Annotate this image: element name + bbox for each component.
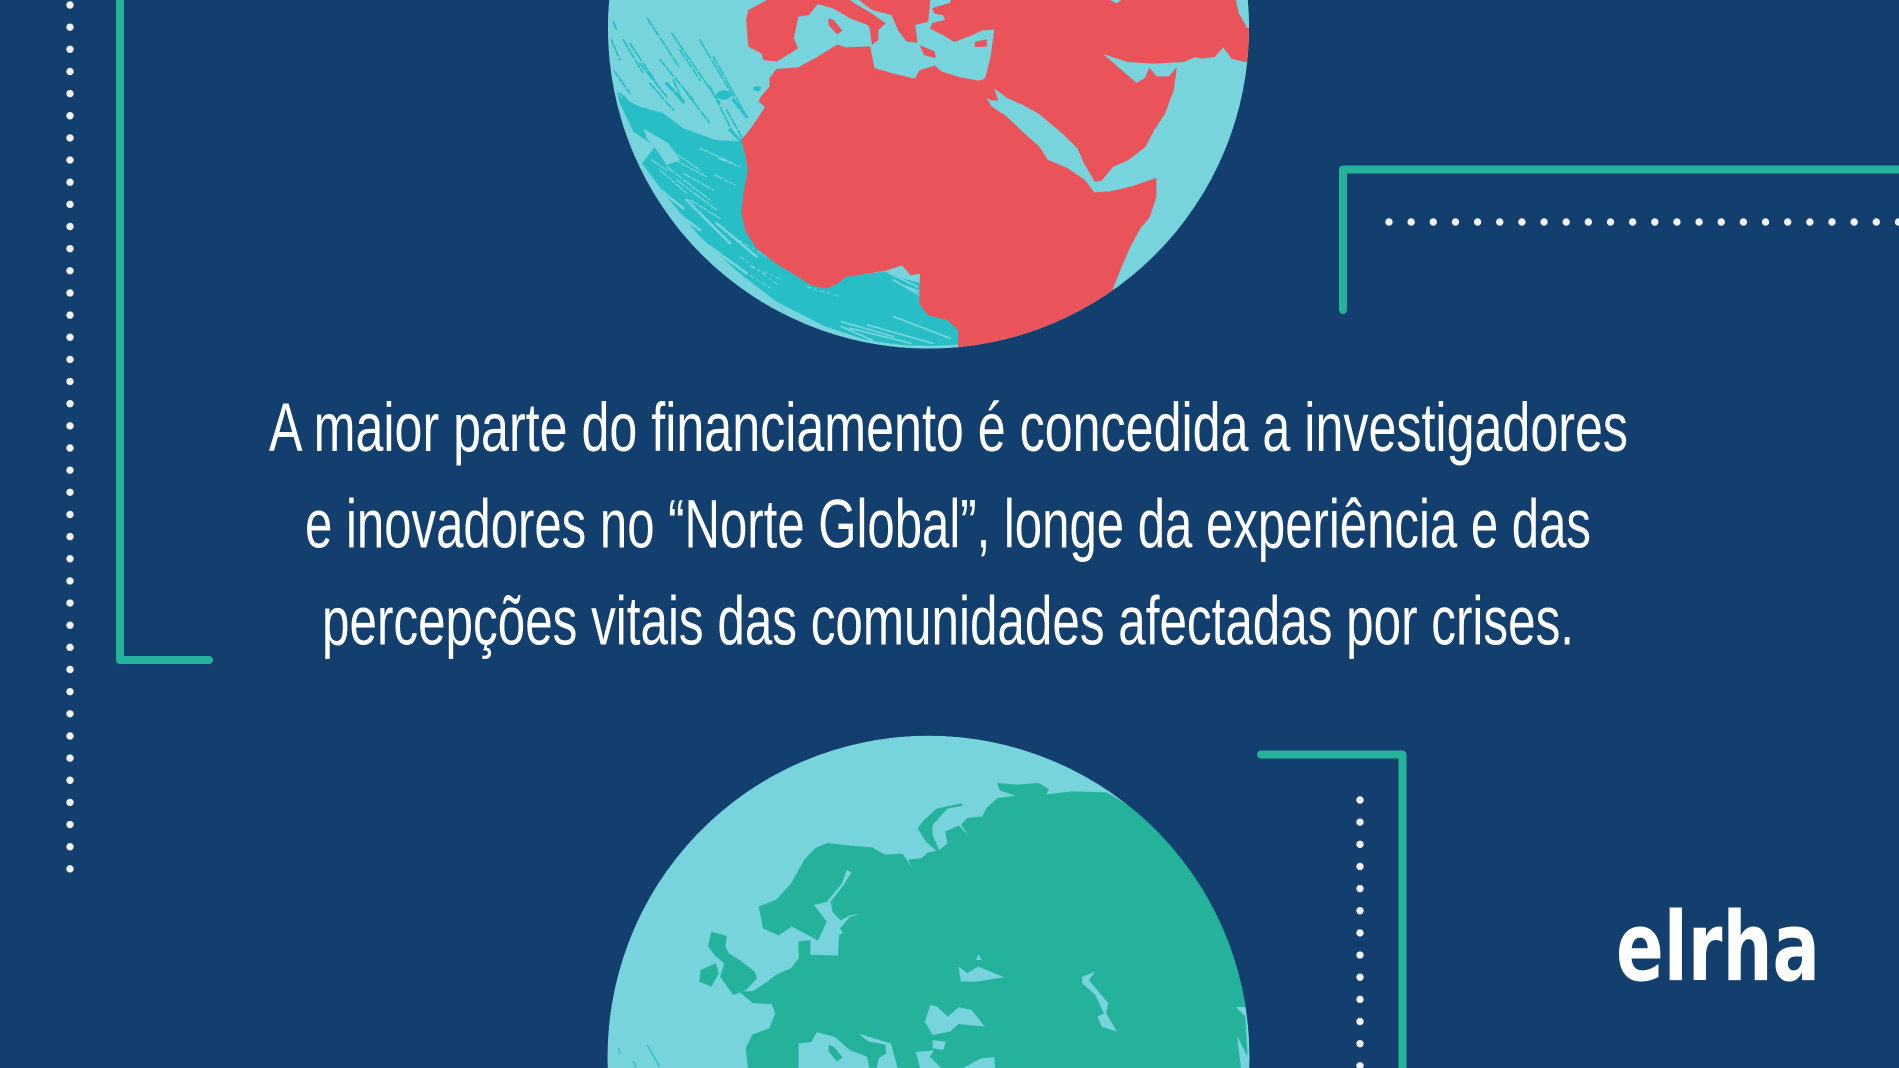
ocean streaks off West Africa [610,18,840,297]
top right dotted line [1389,218,1899,226]
islands: Britain and Ireland [699,932,757,995]
bottom right dotted line [1356,800,1364,1066]
Denmark [798,940,810,958]
ocean shading band [616,95,959,349]
logo: elrha: elrha [1616,893,1820,1003]
land: Balkans and Greece [857,0,930,43]
island: Sardinia [829,1045,842,1062]
left dotted line [66,5,74,872]
islands: Sardinia, Crete, Cyprus [829,18,987,58]
ocean streaks near Africa's south west [842,273,950,343]
top globe: red land, Africa [608,0,1267,367]
island: Novaya Zemlya [917,803,962,852]
left green bracket [120,0,209,660]
bottom right green bracket [1261,754,1402,1068]
Black Sea and Caspian [925,1005,985,1050]
land: Iberia, France and Italy [746,0,886,62]
globe light rim [609,0,1248,348]
paragraph [269,389,1628,660]
bottom globe: green land, Europe and Asia [608,736,1284,1068]
land: Africa and Asia [742,0,1267,367]
ocean streaks [618,1045,659,1067]
top right green bracket [1343,170,1899,310]
land: Eurasia [740,783,1284,1068]
Aral and lakes [959,954,1117,1032]
